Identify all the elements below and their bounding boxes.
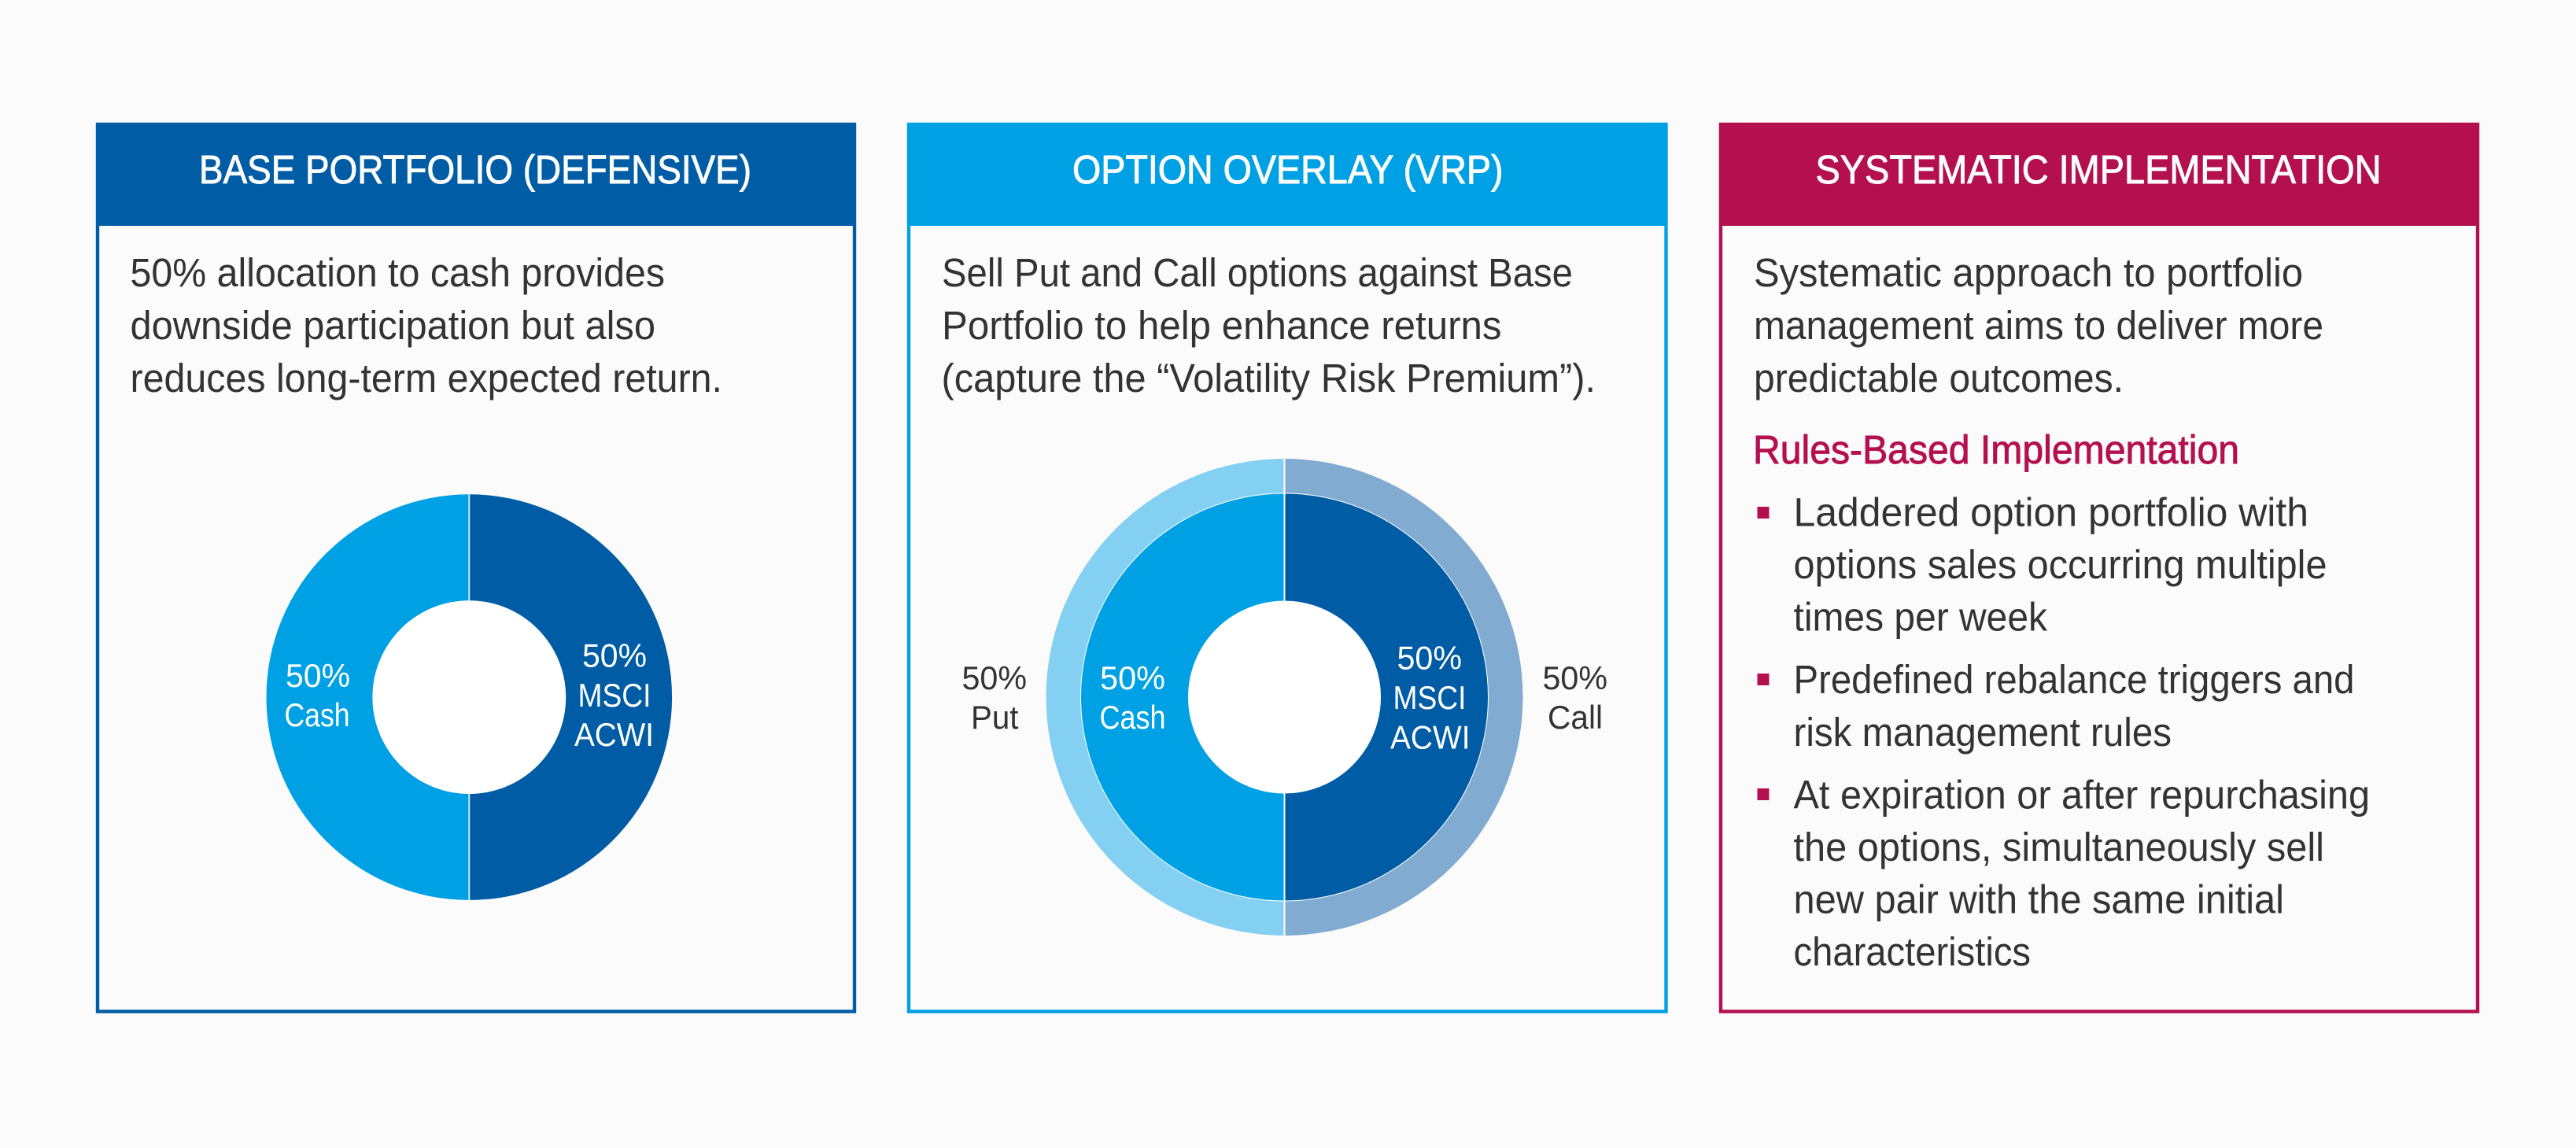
label: 50% MSCI ACWI [1390,639,1470,755]
bullet: predefined rebalance triggers: Predefined rebalance triggers and [1794,657,2354,702]
donut chart: overlay allocation [961,459,1607,936]
label: 50% put [961,659,1027,736]
label: 50% MSCI ACWI: MSCI [578,677,651,714]
bullet: repurchasing at expiration: the options, simultaneously sell [1794,825,2324,869]
text block: option overlay description: Sell Put and Call options against Base [942,250,1573,295]
text block: base portfolio description: 50% allocation to cash provides [131,250,665,295]
label: 50% cash: Cash [1100,699,1166,736]
label: 50% cash [285,657,350,733]
label: 50% MSCI ACWI: 50% [1397,639,1462,677]
bullet: laddered option portfolio [1758,489,2327,639]
panel: base portfolio [96,123,856,1012]
bullet: repurchasing at expiration [1758,773,2370,974]
panel header: base portfolio [96,123,856,226]
label: 50% cash: Cash [285,696,349,733]
inner ring: cash and MSCI ACWI [1080,493,1489,902]
text block: base portfolio description: downside participation but also [131,303,655,348]
text block: option overlay description: Portfolio to help enhance returns [942,303,1501,348]
bullet: predefined rebalance triggers [1758,657,2354,755]
label: 50% cash: 50% [1100,659,1165,696]
bullet: laddered option portfolio: times per week [1794,595,2047,639]
subheading: rules-based implementation: Rules-Based Implementation [1753,427,2239,472]
label: 50% call [1542,659,1607,736]
label: 50% MSCI ACWI [574,637,654,753]
label: 50% cash: 50% [286,657,350,694]
label: 50% MSCI ACWI: 50% [582,637,647,674]
bullet: repurchasing at expiration: characteristics [1794,929,2031,974]
label: 50% put: 50% [961,659,1027,696]
outer ring: put and call [1046,459,1523,936]
text block: systematic approach description: Systematic approach to portfolio [1754,250,2303,295]
panel header: systematic implementation [1719,123,2479,226]
text block: base portfolio description: reduces long-term expected return. [131,356,722,401]
label: 50% cash [1100,659,1166,736]
label: 50% call: Call [1548,699,1603,736]
label: 50% MSCI ACWI: ACWI [574,716,654,753]
bullet: laddered option portfolio: options sales occurring multiple [1794,542,2327,587]
panel header: base portfolio: BASE PORTFOLIO (DEFENSIVE) [199,147,751,192]
panel: option overlay [907,123,1668,1012]
label: 50% put: Put [971,699,1019,736]
label: 50% call: 50% [1542,659,1607,696]
text block: systematic approach description: predictable outcomes. [1754,356,2124,401]
label: 50% MSCI ACWI: ACWI [1390,719,1470,755]
panel frame [909,124,1666,1012]
bullet: repurchasing at expiration: new pair with the same initial [1794,877,2284,922]
panel frame [1721,124,2478,1012]
text block: base portfolio description [131,250,722,401]
panel header: option overlay: OPTION OVERLAY (VRP) [1072,147,1503,192]
bullet: repurchasing at expiration: At expiration or after repurchasing [1794,773,2370,817]
label: 50% MSCI ACWI: MSCI [1393,679,1467,716]
panel: systematic implementation [1719,123,2479,1012]
panel header: option overlay [907,123,1668,226]
donut chart: base allocation [266,494,672,900]
bullet: predefined rebalance triggers: risk management rules [1794,710,2172,755]
text block: systematic approach description [1754,250,2323,401]
text block: systematic approach description: management aims to deliver more [1754,303,2323,348]
bullet: laddered option portfolio: Laddered option portfolio with [1794,489,2308,535]
text block: option overlay description [941,250,1596,401]
text block: option overlay description: (capture the “Volatility Risk Premium”). [941,356,1596,401]
panel frame [98,124,854,1012]
panel header: systematic implementation: SYSTEMATIC IMPLEMENTATION [1816,147,2381,192]
